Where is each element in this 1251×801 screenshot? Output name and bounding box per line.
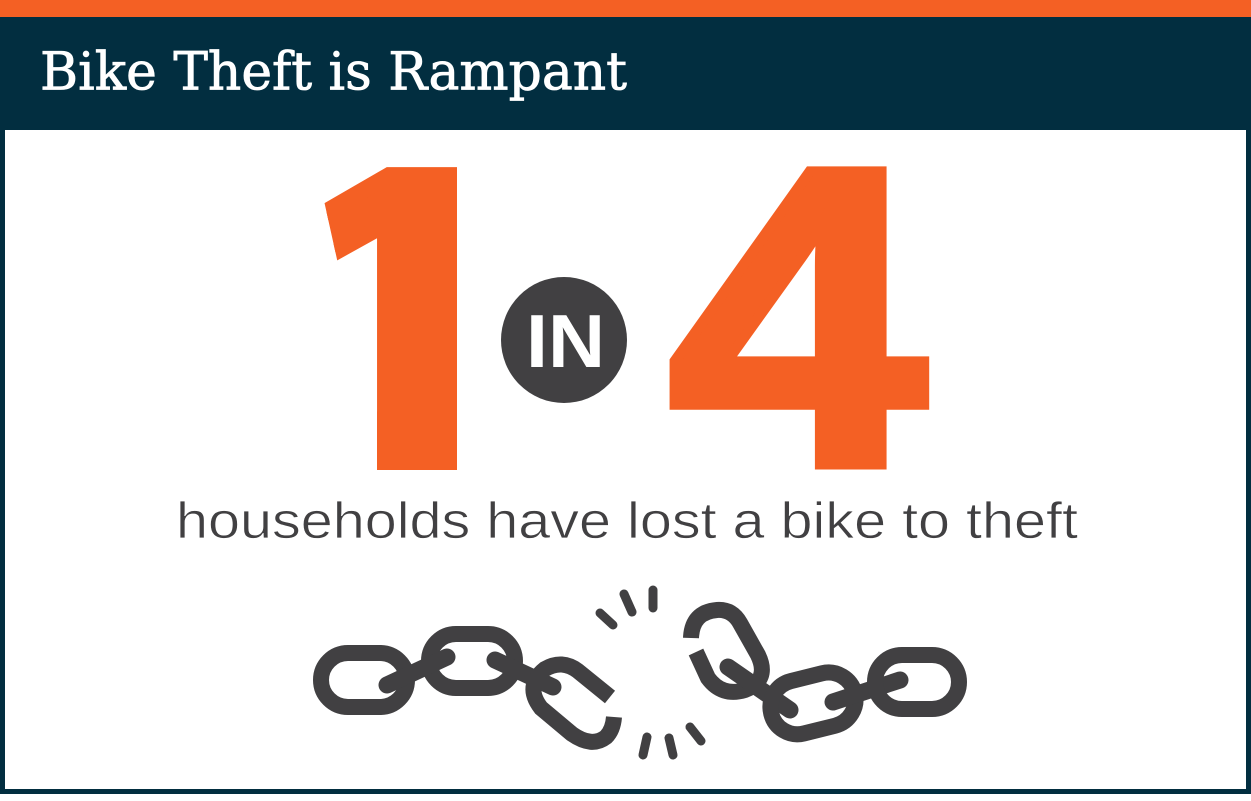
break sparks: [600, 590, 701, 755]
left chain: [321, 634, 614, 742]
icon: broken chain: [321, 590, 959, 755]
header band: [0, 17, 1251, 130]
title: Bike Theft is Rampant: [40, 42, 627, 102]
top accent bar: [0, 0, 1251, 17]
right chain: [691, 610, 959, 740]
numeral 4: 4: [668, 80, 929, 555]
IN badge: [501, 277, 627, 403]
IN badge: IN: [526, 299, 605, 383]
numeral 1: 1: [277, 84, 537, 551]
caption: households have lost a bike to theft: [176, 492, 1078, 549]
statistic: 1 in 4: [277, 80, 929, 555]
